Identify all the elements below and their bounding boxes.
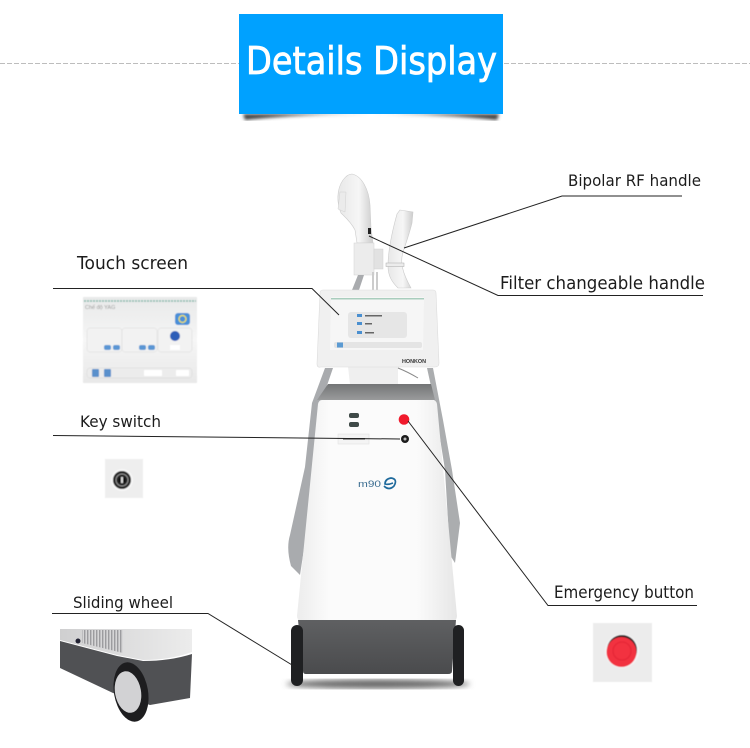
title: Details Display [246,39,497,83]
banner shadow [243,114,499,120]
light upper housing [60,629,192,660]
callout: sliding wheel [52,593,297,668]
key switch detail image [105,459,143,498]
brand name: HONKON [402,359,426,365]
callout: touch screen [53,254,339,315]
callout: emergency button [408,421,697,606]
cabinet top band [317,384,435,400]
callout: sliding wheel: Sliding wheel [73,593,173,612]
touch screen panel [317,290,439,367]
filter changeable handle [338,174,383,290]
indicator slots [349,413,359,418]
dashed header rule [0,62,750,64]
callout: filter changeable handle: Filter changeable handle [500,274,705,294]
power icon [175,313,190,325]
callout: key switch [53,412,400,439]
callout: emergency button: Emergency button [554,583,694,602]
callout: bipolar RF handle [404,171,701,248]
wheel hub [112,669,144,715]
cabinet dark base [298,620,456,674]
callout: filter changeable handle [369,236,705,296]
emergency button on machine [399,414,409,425]
bipolar RF handle [386,210,413,288]
machine illustration [286,174,470,688]
wheel [109,660,153,724]
emergency button detail image [593,623,652,682]
screen menu items [357,314,382,334]
left wheel [291,625,303,686]
fan icon [170,331,180,341]
callout: bipolar RF handle: Bipolar RF handle [568,171,701,190]
footer bar [87,368,192,378]
screen heading: Chế độ YAG [85,305,115,311]
brand logo: m90 [358,479,381,489]
dark base [60,641,192,705]
neck connector [348,367,398,384]
screen display [330,297,424,350]
settings cards [87,328,122,352]
key switch on machine [401,435,409,443]
card buttons [104,345,111,350]
touch screen detail image [83,297,197,383]
card slot [338,434,369,444]
cabinet white body [297,400,457,621]
right wheel [453,625,464,686]
sliding wheel detail image [60,629,192,724]
grey cable sleeves [288,368,333,575]
vent slots [82,630,123,653]
banner background [239,14,503,114]
brand logo [358,478,395,489]
title banner [239,14,503,120]
callout: touch screen: Touch screen [76,254,188,274]
floor shadow [286,680,470,688]
callout: key switch: Key switch [80,412,161,431]
